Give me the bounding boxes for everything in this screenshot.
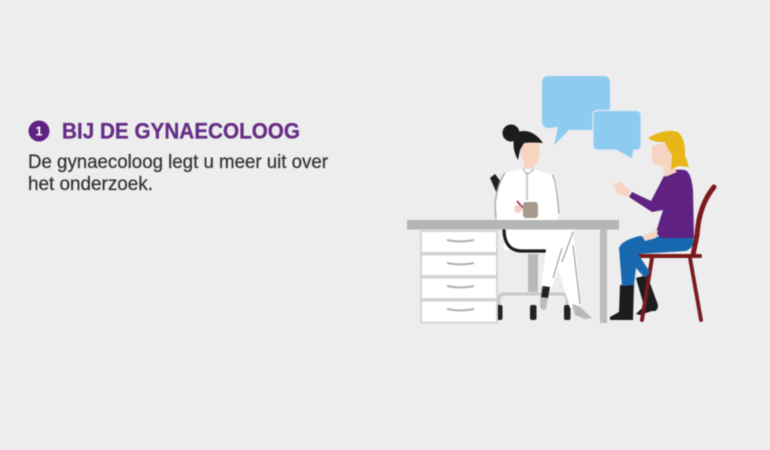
doctor's neck and face [520,140,540,172]
description text: De gynaecoloog legt u meer uit over [28,151,328,173]
patient's hair [648,131,689,170]
icon: step number 1 [28,120,50,142]
jeans [619,236,693,286]
doctor [495,124,592,319]
description text: het onderzoek. [28,173,153,195]
desk leg [600,229,607,323]
doctor's white coat [495,169,560,220]
patient's chair [639,187,714,320]
icon: large speech bubble [542,76,610,145]
chair front leg over boot [642,258,652,320]
back boot [636,275,658,315]
desk [407,220,619,323]
title: BIJ DE GYNAECOLOOG [62,118,300,144]
patient's hands [613,182,631,197]
front boot [610,285,634,320]
drawer handles [447,240,474,310]
description text [28,151,328,195]
patient's face and neck [652,142,677,177]
doctor's chair [490,174,570,320]
patient's sweater [629,170,694,238]
icon: small speech bubble [593,110,641,159]
heading block [28,118,300,144]
doctor's coffee cup and hands [514,201,538,218]
desk top [407,220,619,230]
doctor's hair bun [502,124,520,142]
patient [610,131,694,320]
doctor's crossed legs [540,229,592,319]
icon: step number 1: 1 [36,124,43,138]
doctor's hair [514,131,543,160]
drawers [421,231,497,322]
illustration: consultation scene [407,76,714,323]
